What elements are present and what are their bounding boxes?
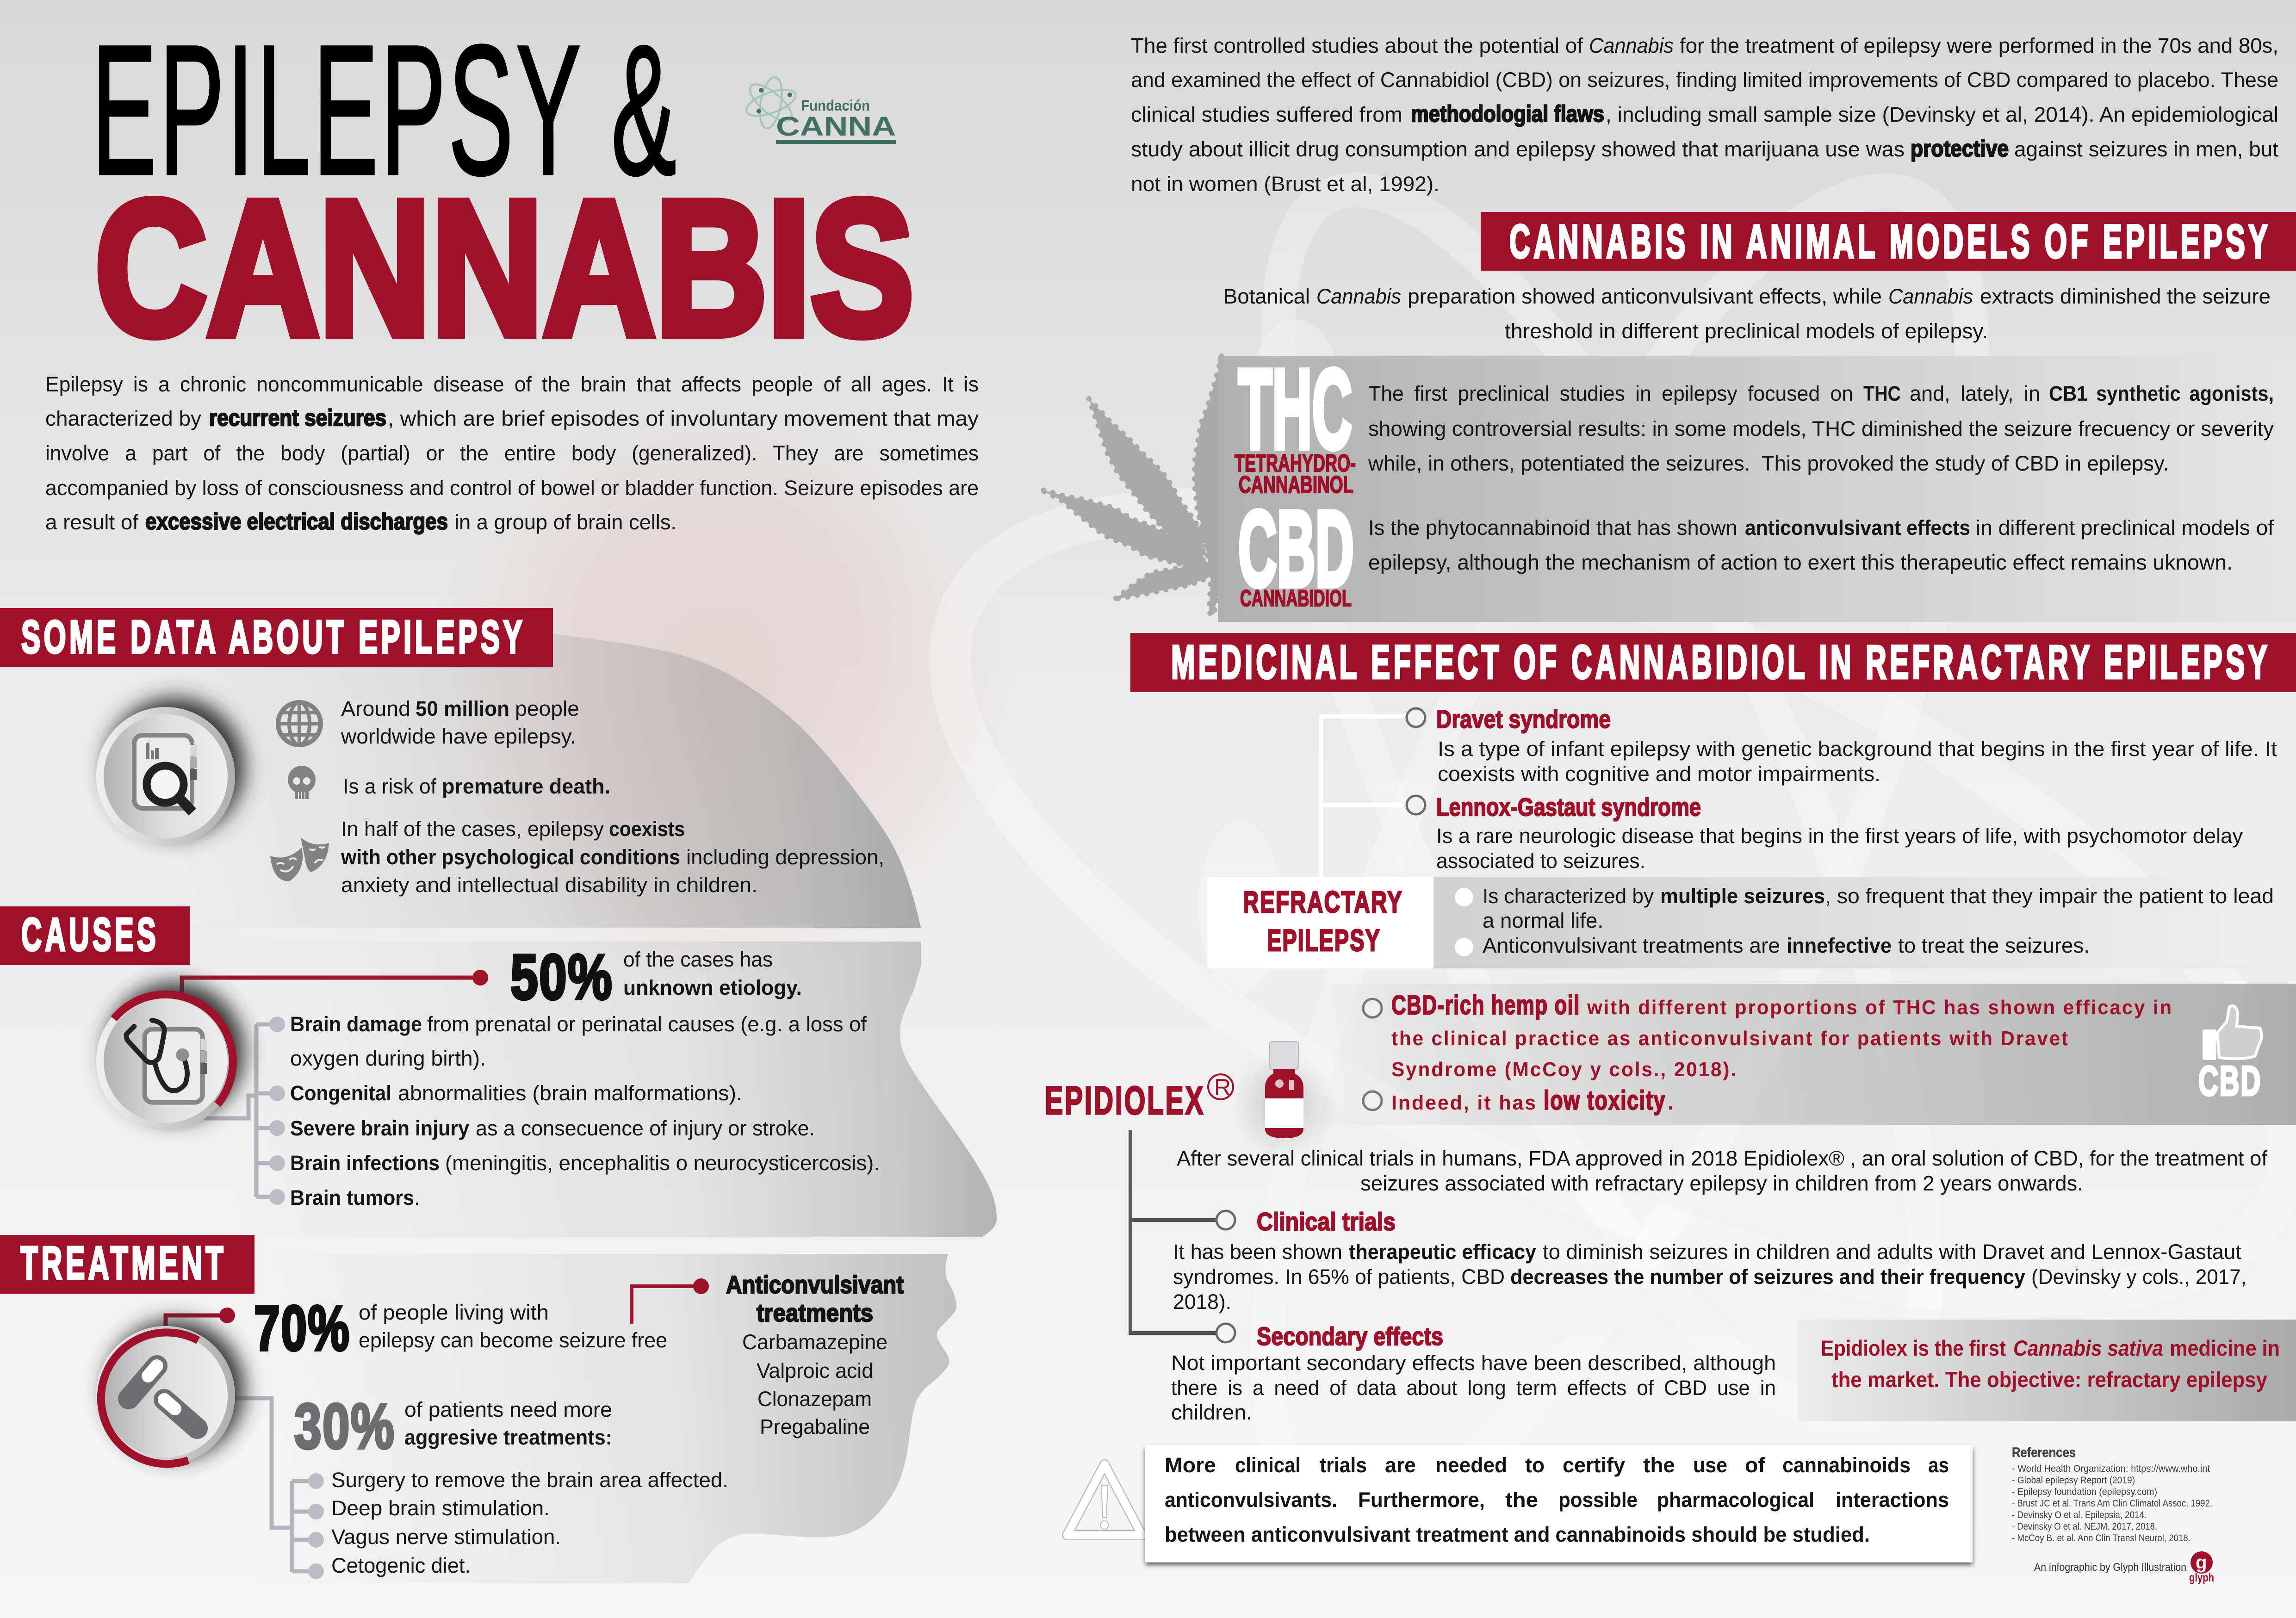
aggressive treatment list: Cetogenic diet. <box>331 1554 471 1577</box>
Epidiolex tree connector <box>1130 1130 1218 1333</box>
warning box: are <box>1385 1453 1416 1477</box>
clinical trials: decreases the number of seizures and their frequency <box>1510 1265 2025 1289</box>
CBD label <box>1238 489 1354 611</box>
data: 50 million <box>341 697 579 748</box>
anticonvulsivant treatments list <box>726 1271 904 1438</box>
causes list: (meningitis, encephalitis o neurocysticercosis). <box>445 1151 880 1175</box>
references: - McCoy B. et al. Ann Clin Transl Neurol, 2018. <box>2012 1533 2191 1544</box>
causes list: from prenatal or perinatal causes (e.g. a loss of <box>427 1012 867 1036</box>
THC text: showing controversial results: in some models, THC diminished the seizure frecuency or severity <box>1368 417 2274 440</box>
panel: refractory epilepsy: multiple seizures <box>1660 884 1825 908</box>
references: References <box>2012 1445 2076 1460</box>
intro paragraph: right column: study about illicit drug consumption and epilepsy showed that marijuana use was <box>1131 137 1905 161</box>
causes list: as a consecuence of injury or stroke. <box>476 1116 815 1140</box>
references: - Brust JC et al. Trans Am Clin Climatol Assoc, 1992. <box>2012 1498 2212 1509</box>
data: 50 million: 50 million <box>416 697 509 720</box>
stat text: seizure free: of people living with <box>359 1301 549 1324</box>
intro paragraph: right column: protective <box>1911 136 2009 161</box>
syndrome tree connector <box>1321 716 1408 877</box>
aggressive treatment list <box>331 1468 728 1577</box>
icon: warning triangle <box>1067 1464 1142 1535</box>
Dravet syndrome: Dravet syndrome <box>1436 705 1611 733</box>
THC text: The first preclinical studies in epilepsy focused on <box>1368 382 1853 405</box>
data: coexisting conditions: coexists <box>609 817 685 841</box>
data: 50 million: people <box>515 697 579 720</box>
references: - World Health Organization: https://www.who.int <box>2012 1463 2210 1474</box>
heading: treatment <box>0 1235 254 1294</box>
aggressive treatment list: Deep brain stimulation. <box>331 1496 550 1520</box>
warning box: trials <box>1320 1453 1367 1477</box>
intro paragraph: right column: against seizures in men, but <box>2014 137 2278 161</box>
FDA approval text: seizures associated with refractary epilepsy in children from 2 years onwards. <box>1360 1172 2083 1195</box>
panel: CBD-rich hemp oil: with different proportions of THC has shown efficacy in <box>1587 996 2173 1019</box>
panel: refractory epilepsy: , so frequent that they impair the patient to lead <box>1825 884 2274 908</box>
warning box: to <box>1525 1453 1545 1477</box>
stat text: aggressive treatments <box>404 1398 612 1449</box>
references: - Devinsky O et al. NEJM. 2017, 2018. <box>2012 1521 2157 1532</box>
panel: refractory epilepsy: to treat the seizures. <box>1898 934 2090 957</box>
animal models summary <box>1223 285 2271 343</box>
credit and glyph logo: glyph <box>2189 1570 2214 1584</box>
causes list: Severe brain injury <box>290 1116 469 1140</box>
secondary effects <box>1171 1322 1776 1424</box>
Lennox-Gastaut syndrome: Is a rare neurologic disease that begins in the first years of life, with psychomotor delay <box>1436 824 2243 848</box>
intro paragraph: excessive electrical discharges <box>145 508 448 534</box>
credit and glyph logo <box>2034 1551 2214 1584</box>
intro paragraph: right column: methodologial flaws <box>1411 101 1604 127</box>
animal models summary: Botanical <box>1223 285 1310 308</box>
icon: pills badge <box>96 1320 244 1465</box>
clinical trials: 2018). <box>1173 1290 1231 1314</box>
Lennox-Gastaut syndrome: Lennox-Gastaut syndrome <box>1436 793 1701 821</box>
warning box: Furthermore, <box>1358 1488 1485 1512</box>
warning box: pharmacological <box>1657 1488 1814 1512</box>
causes list: abnormalities (brain malformations). <box>398 1081 742 1105</box>
THC text <box>1368 382 2274 475</box>
intro paragraph: right column: clinical studies suffered from <box>1131 103 1402 126</box>
head silhouette: middle <box>185 942 997 1237</box>
stat text: unknown etiology <box>623 948 802 999</box>
logo: Fundacion Canna: Fundación <box>801 97 870 114</box>
warning box: as <box>1928 1453 1949 1477</box>
data: premature death: premature death. <box>442 775 610 798</box>
anticonvulsivant treatments list: Clonazepam <box>757 1387 872 1411</box>
data: coexisting conditions: anxiety and intellectual disability in children. <box>341 873 757 897</box>
intro paragraph: characterized by <box>45 407 201 430</box>
background atom <box>844 110 2296 1602</box>
warning box: between anticonvulsivant treatment and cannabinoids should be studied. <box>1165 1523 1870 1546</box>
causes list <box>290 1012 880 1209</box>
animal models summary: Cannabis <box>1888 285 1973 308</box>
THC text: while, in others, potentiated the seizures. This provoked the study of CBD in epilepsy. <box>1368 452 2169 475</box>
animal models summary: threshold in different preclinical models of epilepsy. <box>1505 319 1988 343</box>
clinical trials: Clinical trials <box>1257 1207 1396 1236</box>
data: coexisting conditions: with other psychological conditions <box>341 845 680 869</box>
icon: globe <box>278 702 321 745</box>
clinical trials: It has been shown <box>1173 1240 1342 1264</box>
icon: Epidiolex bottle <box>1234 1041 1335 1161</box>
warning box: More <box>1165 1453 1216 1477</box>
logo: Fundacion Canna: CANNA <box>776 112 896 142</box>
intro paragraph: right column: The first controlled studies about the potential of <box>1131 34 1583 57</box>
panel: refractory epilepsy: REFRACTARY <box>1243 885 1403 919</box>
CBD text: epilepsy, although the mechanism of action to exert this therapeutic effect remains uknown. <box>1368 551 2233 574</box>
Dravet syndrome: Is a type of infant epilepsy with genetic background that begins in the first year of life. It <box>1438 737 2277 761</box>
panel: refractory epilepsy <box>1207 877 2296 968</box>
clinical trials: therapeutic efficacy <box>1349 1240 1536 1264</box>
intro paragraph: right column: , including small sample size (Devinsky et al, 2014). An epidemiological <box>1606 103 2278 126</box>
THC text: CB1 synthetic agonists, <box>2049 382 2274 405</box>
panel: refractory epilepsy: Anticonvulsivant treatments are <box>1483 934 1780 957</box>
causes list: Congenital <box>290 1081 391 1105</box>
secondary effects: there is a need of data about long term effects of CBD use in <box>1171 1376 1776 1400</box>
warning box: needed <box>1435 1453 1507 1477</box>
data: coexisting conditions: including depression, <box>686 845 884 869</box>
treatment connector lines <box>166 1278 709 1579</box>
panel: CBD-rich hemp oil: low toxicity <box>1544 1085 1666 1116</box>
secondary effects: children. <box>1171 1401 1252 1424</box>
Epidiolex name: R <box>1214 1074 1231 1100</box>
warning box <box>1145 1445 1973 1565</box>
references: - Global epilepsy Report (2019) <box>2012 1475 2135 1486</box>
animal models summary: extracts diminished the seizure <box>1980 285 2271 308</box>
warning box: clinical <box>1235 1453 1301 1477</box>
intro paragraph: accompanied by loss of consciousness and control of bowel or bladder function. Seizure episodes are <box>45 476 979 500</box>
credit and glyph logo: g <box>2196 1552 2207 1573</box>
data: 50 million: Around <box>341 697 410 720</box>
panel: CBD-rich hemp oil: the clinical practice as anticonvulsivant for patients with Dravet <box>1391 1027 2069 1050</box>
CBD text <box>1368 516 2274 574</box>
stat text: seizure free: epilepsy can become seizure free <box>359 1328 667 1352</box>
causes list: Brain tumors <box>290 1186 414 1209</box>
CBD label: CANNABIDIOL <box>1240 585 1352 611</box>
references <box>2012 1445 2212 1544</box>
aggressive treatment list: Surgery to remove the brain area affected. <box>331 1468 728 1492</box>
heading: causes <box>0 906 190 965</box>
secondary effects: Not important secondary effects have been described, although <box>1171 1351 1776 1375</box>
icon: thumbs up CBD <box>2198 1006 2262 1104</box>
panel: CBD-rich hemp oil: CBD-rich hemp oil <box>1391 990 1580 1020</box>
anticonvulsivant treatments list: Carbamazepine <box>742 1330 887 1354</box>
intro paragraph: right column: Cannabis <box>1589 34 1674 57</box>
intro paragraph: involve a part of the body (partial) or the entire body (generalized). They are sometimes <box>45 441 979 465</box>
stat text: unknown etiology: unknown etiology. <box>623 976 802 999</box>
warning box: cannabinoids <box>1782 1453 1911 1477</box>
warning box: anticonvulsivants. <box>1165 1488 1337 1512</box>
head silhouette: top <box>139 634 921 928</box>
heading: causes: CAUSES <box>21 909 159 961</box>
clinical trials: syndromes. In 65% of patients, CBD <box>1173 1265 1505 1289</box>
intro paragraph <box>45 372 979 534</box>
warning box: of <box>1745 1453 1766 1477</box>
intro paragraph: Epilepsy is a chronic noncommunicable disease of the brain that affects people of all ages. It is <box>45 372 979 396</box>
ring: secondary effects <box>1216 1324 1235 1342</box>
data: coexisting conditions: In half of the cases, epilepsy <box>341 817 604 841</box>
stat text: aggressive treatments: of patients need more <box>404 1398 612 1421</box>
anticonvulsivant treatments list: treatments <box>757 1299 873 1327</box>
credit and glyph logo: An infographic by Glyph Illustration <box>2034 1561 2186 1574</box>
icon: stethoscope badge <box>96 982 244 1130</box>
ring: clinical trials <box>1216 1211 1235 1229</box>
title: Cannabis: CANNABIS <box>95 161 914 375</box>
callout: first cannabis medicine: medicine in <box>2170 1336 2280 1360</box>
panel: CBD-rich hemp oil: Indeed, it has <box>1391 1091 1537 1114</box>
clinical trials: (Devinsky y cols., 2017, <box>2031 1265 2246 1289</box>
ring: Lennox <box>1407 796 1425 814</box>
data: premature death <box>343 775 610 798</box>
references: - Epilepsy foundation (epilepsy.com) <box>2012 1487 2157 1497</box>
Epidiolex name: EPIDIOLEX <box>1045 1079 1205 1123</box>
callout: first cannabis medicine: Cannabis sativa <box>2013 1336 2163 1360</box>
icon: skull <box>288 766 316 799</box>
icon: data badge <box>96 698 244 846</box>
clinical trials: to diminish seizures in children and adults with Dravet and Lennox-Gastaut <box>1543 1240 2241 1264</box>
secondary effects: Secondary effects <box>1257 1322 1443 1351</box>
heading: some data about epilepsy: SOME DATA ABOUT EPILEPSY <box>21 611 526 663</box>
panel: THC and CBD: CBD <box>1238 489 1354 609</box>
warning box: certify <box>1563 1453 1625 1477</box>
ring: Dravet <box>1407 708 1425 727</box>
warning box: use <box>1693 1453 1727 1477</box>
panel: CBD-rich hemp oil: . <box>1668 1090 1674 1114</box>
logo: Fundacion Canna <box>743 75 896 144</box>
Dravet syndrome <box>1436 705 2277 786</box>
animal models summary: Cannabis <box>1316 285 1401 308</box>
panel: CBD-rich hemp oil: Syndrome (McCoy y cols., 2018). <box>1391 1058 1738 1081</box>
pink glow <box>370 393 1064 1018</box>
callout: first cannabis medicine: the market. The objective: refractary epilepsy <box>1831 1367 2267 1392</box>
anticonvulsivant treatments list: Anticonvulsivant <box>726 1271 904 1299</box>
panel: refractory epilepsy: innefective <box>1787 934 1892 957</box>
stat text: aggressive treatments: aggresive treatments: <box>404 1426 612 1449</box>
intro paragraph: in a group of brain cells. <box>454 510 676 534</box>
causes list: . <box>414 1186 420 1209</box>
callout: first cannabis medicine <box>1798 1320 2296 1421</box>
causes list: oxygen during birth). <box>290 1047 486 1070</box>
causes list: Brain damage <box>290 1012 422 1036</box>
heading: treatment: TREATMENT <box>20 1237 227 1289</box>
references: - Devinsky O et al. Epilepsia, 2014. <box>2012 1510 2147 1520</box>
stat: 30 percent: 30% <box>294 1391 395 1462</box>
icon: thumbs up CBD: CBD <box>2198 1058 2262 1104</box>
THC label: CANNABINOL <box>1239 471 1353 498</box>
clinical trials <box>1173 1207 2246 1314</box>
icon: cannabis leaf <box>1043 356 1222 615</box>
warning box: the <box>1643 1453 1675 1477</box>
causes connector lines <box>182 970 488 1205</box>
stat text: unknown etiology: of the cases has <box>623 948 773 971</box>
intro paragraph: recurrent seizures <box>209 405 386 431</box>
THC text: THC <box>1863 382 1901 405</box>
stat text: seizure free <box>359 1301 667 1352</box>
warning box: possible <box>1558 1488 1638 1512</box>
panel: refractory epilepsy: a normal life. <box>1483 909 1603 932</box>
CBD text: anticonvulsivant effects <box>1745 516 1970 539</box>
CBD text: in different preclinical models of <box>1976 516 2274 539</box>
head silhouette: bottom <box>254 1254 956 1583</box>
icon: theatre masks <box>270 837 329 881</box>
Dravet syndrome: coexists with cognitive and motor impairments. <box>1438 762 1880 786</box>
intro paragraph: , which are brief episodes of involuntary movement that may <box>388 407 979 430</box>
panel: refractory epilepsy: Is characterized by <box>1483 884 1654 908</box>
CBD text: Is the phytocannabinoid that has shown <box>1368 516 1738 539</box>
panel: CBD-rich hemp oil <box>1296 984 2296 1125</box>
FDA approval text: After several clinical trials in humans, FDA approved in 2018 Epidiolex® , an oral solution of CBD, for the treatment of <box>1177 1147 2267 1170</box>
intro paragraph: a result of <box>45 510 138 534</box>
stat: 70 percent: 70% <box>254 1293 350 1364</box>
stat: 50 percent: 50% <box>510 942 613 1013</box>
THC label <box>1235 346 1356 498</box>
animal models summary: preparation showed anticonvulsivant effects, while <box>1408 285 1882 308</box>
THC label: TETRAHYDRO- <box>1235 450 1356 477</box>
heading: some data about epilepsy <box>0 608 553 667</box>
THC text: and, lately, in <box>1910 382 2040 405</box>
data: coexisting conditions <box>341 817 884 897</box>
data: 50 million: worldwide have epilepsy. <box>341 725 576 748</box>
aggressive treatment list: Vagus nerve stimulation. <box>331 1525 561 1549</box>
causes list: Brain infections <box>290 1151 440 1175</box>
anticonvulsivant treatments list: Valproic acid <box>757 1359 873 1382</box>
THC label: THC <box>1238 346 1352 472</box>
Lennox-Gastaut syndrome <box>1436 793 2243 873</box>
data: premature death: Is a risk of <box>343 775 436 798</box>
warning box: interactions <box>1836 1488 1949 1512</box>
intro paragraph: right column: for the treatment of epilepsy were performed in the 70s and 80s, <box>1680 34 2278 57</box>
callout: first cannabis medicine: Epidiolex is the first <box>1821 1336 2006 1360</box>
panel: refractory epilepsy: EPILEPSY <box>1267 923 1381 957</box>
FDA approval text <box>1177 1147 2267 1195</box>
intro paragraph: right column: and examined the effect of Cannabidiol (CBD) on seizures, finding limited improvements of CBD compared to placebo. These <box>1131 68 2278 92</box>
Lennox-Gastaut syndrome: associated to seizures. <box>1436 849 1645 873</box>
intro paragraph: right column <box>1131 34 2278 196</box>
anticonvulsivant treatments list: Pregabaline <box>760 1415 870 1438</box>
warning box: the <box>1505 1488 1538 1512</box>
intro paragraph: right column: not in women (Brust et al, 1992). <box>1131 172 1440 196</box>
panel: THC and CBD <box>1218 346 2296 622</box>
